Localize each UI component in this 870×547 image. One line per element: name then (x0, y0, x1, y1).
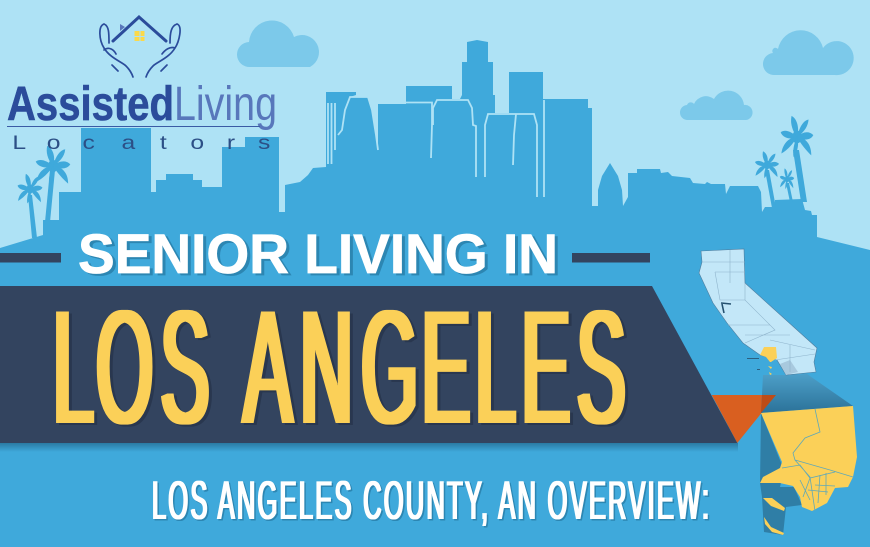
clouds (237, 21, 854, 120)
title banner: Los Angeles: LOS ANGELES (53, 276, 626, 458)
subheading: county overview: LOS ANGELES COUNTY, AN OVERVIEW: (152, 470, 709, 532)
logo: Assisted Living Locators: Locators (12, 132, 270, 153)
icon: window (134, 31, 144, 41)
heading: Senior Living In: SENIOR LIVING IN (78, 222, 558, 285)
skyline outlines (328, 97, 544, 197)
map: California to Los Angeles County (699, 249, 857, 535)
logo: Assisted Living Locators: Living (174, 78, 277, 131)
zoom beams (761, 374, 853, 413)
logo: Assisted Living Locators (7, 17, 277, 153)
logo wordmark: Assisted (7, 78, 174, 131)
orange ribbon fold (712, 395, 776, 443)
map: California (699, 249, 817, 375)
palm trees (18, 116, 813, 238)
banner shadow (0, 443, 738, 452)
map: Los Angeles County (760, 406, 857, 535)
LA County locator (760, 347, 777, 375)
icon: house in hands (100, 17, 180, 77)
